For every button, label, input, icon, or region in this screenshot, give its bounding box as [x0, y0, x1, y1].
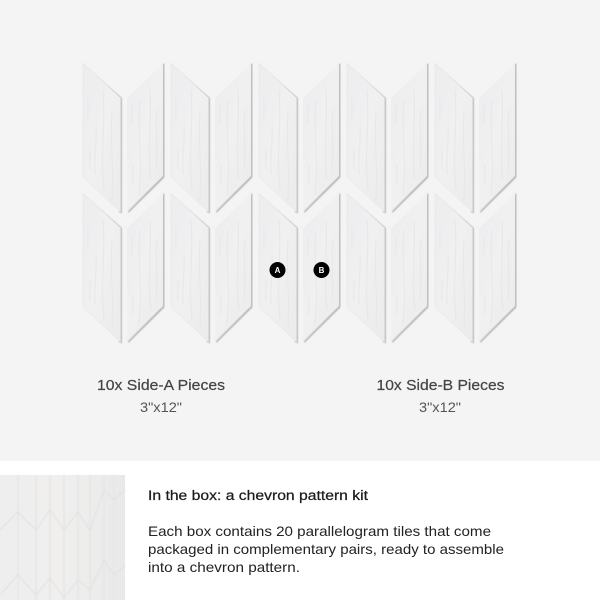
- label: side A pieces: 3"x12": [140, 399, 182, 415]
- tile row 1: [83, 63, 516, 214]
- tile grid: [83, 63, 516, 344]
- description text: packaged in complementary pairs, ready to assemble: [148, 541, 504, 557]
- photo: installed chevron tiles: [0, 475, 125, 600]
- heading: in the box: In the box: a chevron pattern kit: [148, 488, 368, 503]
- badge A: A: [275, 266, 281, 275]
- description text: Each box contains 20 parallelogram tiles that come: [148, 523, 491, 539]
- label: side A pieces: [97, 378, 225, 415]
- badge A: [270, 262, 286, 278]
- label: side B pieces: 10x Side-B Pieces: [376, 378, 504, 394]
- badge B: B: [319, 266, 325, 275]
- badge B: [314, 262, 330, 278]
- label: side A pieces: 10x Side-A Pieces: [97, 378, 225, 394]
- background panel: [0, 0, 600, 461]
- tile row 2: [83, 193, 516, 344]
- label: side B pieces: 3"x12": [419, 399, 461, 415]
- description text: [148, 523, 504, 575]
- description text: into a chevron pattern.: [148, 559, 300, 575]
- label: side B pieces: [376, 378, 504, 415]
